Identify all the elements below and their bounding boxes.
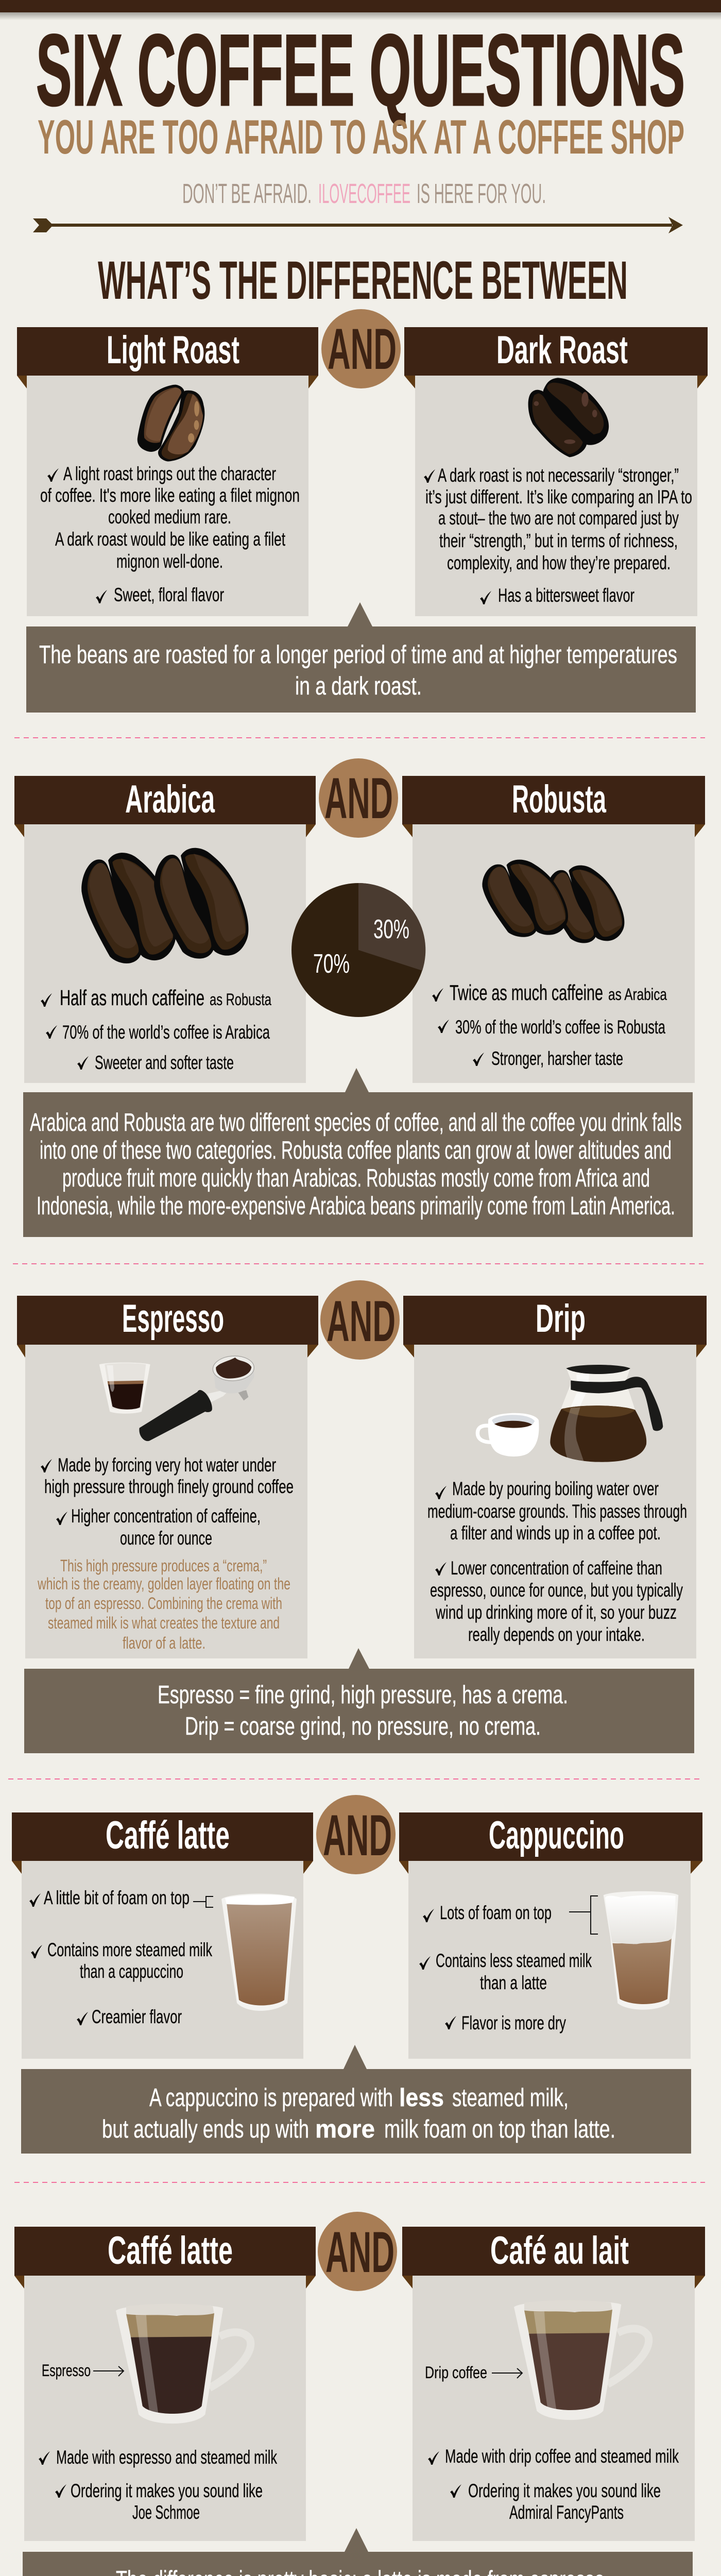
callout: milk and foam: A cappuccino is prepared with — [149, 2084, 393, 2112]
section 5: latte vs cafe au lait — [14, 2212, 705, 2576]
icon: espresso shot — [99, 1363, 150, 1414]
bullets: espresso: Higher concentration of caffeine, — [71, 1505, 261, 1527]
AND badge: AND — [323, 1803, 392, 1868]
AND badge — [319, 758, 398, 838]
bullets: cappuccino — [419, 1902, 592, 2033]
bullets: arabica: Half as much caffeine — [60, 986, 204, 1010]
icon: cappuccino glass — [604, 1891, 678, 2010]
pie chart: 70/30: 30% — [373, 914, 409, 944]
bullets: dark roast — [424, 465, 692, 606]
icon: latte mug — [116, 2304, 251, 2424]
bracket: foam — [569, 1896, 598, 1934]
callout: grind summary: Espresso = fine grind, high pressure, has a crema. — [158, 1681, 568, 1709]
panel: caffe latte — [12, 1812, 313, 2059]
AND badge: AND — [325, 2220, 394, 2284]
callout: milk and foam — [21, 2045, 691, 2154]
panel: cappuccino: Cappuccino — [489, 1814, 624, 1857]
panel: arabica: Arabica — [125, 777, 215, 821]
bullets: light roast: A dark roast would be like eating a filet — [55, 529, 286, 550]
bullets: drip: really depends on your intake. — [468, 1624, 645, 1645]
note: crema: steamed milk is what creates the texture and — [48, 1614, 280, 1632]
bullets: espresso: ounce for ounce — [120, 1528, 212, 1549]
bullets: robusta: as Arabica — [608, 985, 667, 1004]
bullets: espresso — [41, 1454, 294, 1549]
bullets: latte: Creamier flavor — [92, 2006, 182, 2027]
bullets: espresso: Made by forcing very hot water under — [58, 1454, 276, 1476]
panel: dark roast — [404, 327, 708, 616]
callout: milk and foam: milk foam on top than latte. — [384, 2115, 615, 2143]
panel: cafe au lait: Café au lait — [490, 2229, 629, 2273]
pie chart: 70/30: 70% — [313, 949, 350, 979]
tagline: IS HERE FOR YOU. — [417, 178, 546, 209]
panel: light roast: Light Roast — [107, 328, 239, 372]
bullets: latte: A little bit of foam on top — [44, 1887, 190, 1908]
icon: dark roast bean — [528, 378, 609, 457]
panel: light roast — [17, 327, 318, 616]
callout: species explanation — [23, 1068, 693, 1237]
bullets: light roast — [40, 463, 300, 605]
label: espresso arrow: Espresso — [42, 2361, 91, 2380]
note: crema: which is the creamy, golden layer floating on the — [37, 1574, 290, 1593]
bullets: robusta: Stronger, harsher taste — [491, 1048, 623, 1069]
callout: latte vs au lait — [23, 2528, 693, 2576]
arrow divider — [33, 217, 683, 233]
tagline: DON’T BE AFRAID. — [182, 178, 312, 209]
AND badge — [320, 1280, 400, 1360]
bullets: cappuccino: Lots of foam on top — [440, 1902, 552, 1923]
panel: espresso — [17, 1296, 318, 1658]
bullets: arabica — [41, 986, 271, 1073]
bullets: light roast: Sweet, floral flavor — [114, 584, 224, 605]
callout: roast explanation: in a dark roast. — [295, 672, 422, 700]
icon: latte glass — [221, 1894, 297, 2011]
panel: robusta: Robusta — [512, 777, 606, 821]
icon: cafe au lait mug — [514, 2300, 649, 2420]
panel: robusta — [402, 776, 705, 1083]
bullets: drip — [427, 1478, 687, 1645]
bracket: foam — [193, 1896, 213, 1907]
note: crema — [37, 1556, 290, 1652]
section 3: espresso vs drip — [17, 1280, 707, 1753]
AND badge: AND — [328, 317, 397, 381]
bullets: light roast: of coffee. It's more like eating a filet mignon — [40, 485, 300, 506]
callout: milk and foam: less — [399, 2084, 444, 2112]
icon: coffee mug — [477, 1413, 539, 1456]
icon: coffee carafe — [550, 1365, 663, 1462]
AND badge — [316, 1795, 396, 1874]
bullets: cafe au lait — [428, 2446, 679, 2523]
callout: grind summary: Drip = coarse grind, no pressure, no crema. — [185, 1713, 541, 1740]
top bar — [0, 0, 721, 20]
note: crema: top of an espresso. Combining the crema with — [45, 1594, 282, 1613]
bullets: espresso: high pressure through finely ground coffee — [44, 1476, 294, 1497]
callout: grind summary — [24, 1648, 694, 1753]
callout: milk and foam: but actually ends up with — [102, 2115, 309, 2143]
tagline — [182, 178, 546, 209]
note: crema: This high pressure produces a “crema,” — [60, 1556, 267, 1575]
bullets: dark roast: Has a bittersweet flavor — [498, 585, 634, 606]
bullets: light roast: A light roast brings out the character — [63, 463, 276, 484]
icon: arabica beans — [81, 848, 248, 963]
icon: portafilter — [139, 1355, 255, 1441]
bullets: robusta — [432, 980, 667, 1069]
callout: roast explanation — [26, 602, 696, 713]
bullets: light roast: mignon well-done. — [116, 551, 223, 572]
label: drip coffee arrow: Drip coffee — [425, 2363, 487, 2382]
bullets: cafe au lait: Admiral FancyPants — [509, 2502, 624, 2523]
panel: drip: Drip — [536, 1297, 586, 1341]
bullets: latte: Joe Schmoe — [132, 2502, 200, 2523]
panel: cappuccino — [399, 1812, 702, 2059]
bullets: latte — [29, 1887, 212, 2027]
note: crema: flavor of a latte. — [123, 1634, 205, 1652]
AND badge — [321, 309, 401, 388]
bullets: robusta: Twice as much caffeine — [450, 980, 603, 1005]
section 4: latte vs cappuccino — [12, 1795, 702, 2154]
tagline: ILOVECOFFEE — [318, 178, 410, 209]
bullets: latte — [39, 2447, 277, 2523]
panel: espresso: Espresso — [122, 1297, 224, 1341]
bullets: arabica: 70% of the world’s coffee is Arabica — [62, 1022, 270, 1043]
panel: caffe latte — [14, 2227, 316, 2541]
icon: light roast bean — [138, 385, 204, 462]
panel: dark roast: Dark Roast — [496, 328, 628, 372]
panel: drip — [403, 1296, 707, 1658]
callout: milk and foam: steamed milk, — [452, 2084, 569, 2112]
panel: caffe latte: Caffé latte — [108, 2229, 233, 2273]
pie chart: 70/30 — [291, 883, 425, 1017]
bullets: latte: Ordering it makes you sound like — [71, 2480, 263, 2501]
bullets: light roast: cooked medium rare. — [108, 506, 231, 528]
AND badge: AND — [324, 766, 393, 831]
bullets: latte: Contains more steamed milk — [47, 1939, 212, 1960]
panel: caffe latte: Caffé latte — [106, 1814, 230, 1857]
panel: cafe au lait — [402, 2227, 705, 2541]
bullets: arabica: as Robusta — [210, 990, 271, 1009]
bullets: cappuccino: Contains less steamed milk — [436, 1950, 592, 1971]
bullets: latte: than a cappuccino — [80, 1961, 183, 1982]
bullets: cappuccino: than a latte — [480, 1972, 547, 1993]
callout: milk and foam: more — [315, 2115, 375, 2143]
section 1: light vs dark roast — [17, 309, 708, 713]
bullets: arabica: Sweeter and softer taste — [95, 1052, 234, 1073]
bullets: latte: Made with espresso and steamed milk — [56, 2447, 277, 2468]
AND badge: AND — [327, 1289, 396, 1353]
panel: arabica — [14, 776, 316, 1083]
section 2: arabica vs robusta — [14, 758, 705, 1237]
AND badge — [318, 2212, 397, 2291]
icon: robusta beans — [482, 860, 624, 943]
bullets: cappuccino: Flavor is more dry — [461, 2012, 566, 2033]
